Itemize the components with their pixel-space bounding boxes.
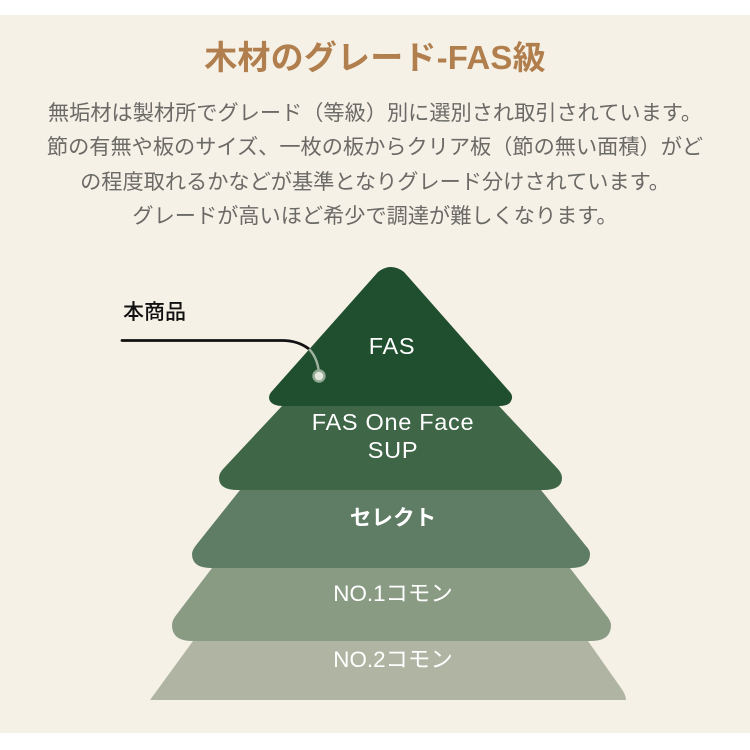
description text: の程度取れるかなどが基準となりグレード分けされています。 <box>80 171 670 194</box>
callout line inside the pyramid <box>309 349 319 372</box>
tier: FAS <box>269 267 512 406</box>
tier: FAS One Face SUP: FAS One Face <box>312 409 474 435</box>
tier: NO.2 common <box>150 641 626 700</box>
callout dot <box>314 370 324 382</box>
tier: select: セレクト <box>350 505 436 530</box>
tier: NO.1 common <box>172 568 611 641</box>
description text <box>47 102 703 228</box>
tier: select <box>192 490 590 568</box>
tier: NO.1 common: NO.1コモン <box>333 581 453 606</box>
description text: グレードが高いほど希少で調達が難しくなります。 <box>132 205 618 228</box>
tier: FAS One Face SUP <box>219 406 562 490</box>
callout label: 本商品 <box>123 301 186 324</box>
description text: 節の有無や板のサイズ、一枚の板からクリア板（節の無い面積）がど <box>47 136 703 159</box>
callout line <box>122 340 309 349</box>
tier: NO.2 common: NO.2コモン <box>333 647 453 672</box>
tier: FAS One Face SUP: SUP <box>368 437 418 463</box>
tier: FAS: FAS <box>369 333 415 359</box>
title: 木材のグレード-FAS級 <box>204 39 546 76</box>
callout: this product <box>122 301 324 382</box>
description text: 無垢材は製材所でグレード（等級）別に選別され取引されています。 <box>48 102 702 125</box>
